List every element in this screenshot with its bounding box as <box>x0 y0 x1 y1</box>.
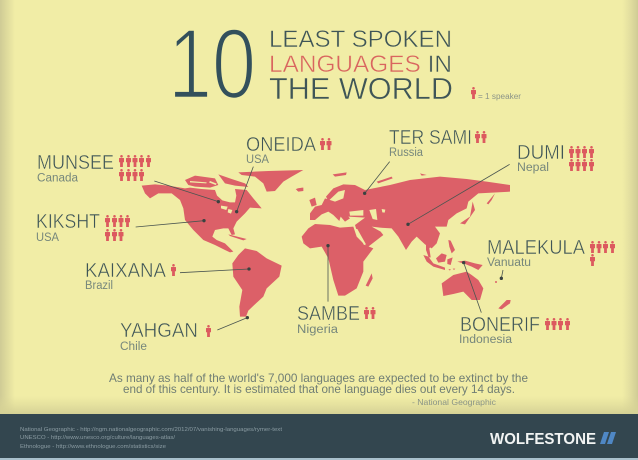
quote paragraph: As many as half of the world's 7,000 languages are expected to be extinct by the <box>109 371 528 385</box>
legend: 1 speaker: = 1 speaker <box>478 92 521 101</box>
footer bar <box>0 414 638 460</box>
quote paragraph <box>109 371 528 407</box>
label: Dumi <box>517 142 594 174</box>
label: Sambe: SAMBE <box>297 303 360 325</box>
inland seas <box>349 209 385 245</box>
label: Sambe <box>297 303 376 336</box>
label: Sambe: Nigeria <box>297 324 339 336</box>
label: Bonerif <box>459 314 570 346</box>
label: Kiksht: KIKSHT <box>36 211 100 233</box>
title line 1: LEAST SPOKEN <box>269 26 452 53</box>
label: Munsee: MUNSEE <box>37 152 114 174</box>
label: Ter Sami: TER SAMI <box>389 127 472 149</box>
label: Yahgan: YAHGAN <box>120 320 198 342</box>
label: Malekula: Vanuatu <box>487 257 531 269</box>
label: Dumi: DUMI <box>517 142 565 164</box>
Southeast Asia and Oceania <box>423 240 511 309</box>
title <box>168 8 453 119</box>
label: Bonerif: BONERIF <box>460 314 540 336</box>
label: Ter Sami <box>389 127 486 159</box>
label: Oneida: ONEIDA <box>246 134 317 156</box>
title line 2: LANGUAGES IN <box>269 51 452 78</box>
label: Munsee <box>37 152 151 184</box>
source links: Ethnologue - http://www.ethnologue.com/statistics/size <box>20 444 166 450</box>
label: Yahgan: Chile <box>120 341 147 353</box>
Africa, Eurasia and northern islands <box>297 172 510 296</box>
quote paragraph: - National Geographic <box>412 397 497 407</box>
label: Munsee: Canada <box>37 172 79 184</box>
source links: UNESCO - http://www.unesco.org/culture/languages-atlas/ <box>20 435 175 441</box>
label: Kaixana: KAIXANA <box>85 260 167 282</box>
South America <box>232 248 282 317</box>
label: Kaixana <box>85 260 176 292</box>
label: Yahgan <box>120 320 211 353</box>
label: Malekula <box>487 237 615 269</box>
label: Kaixana: Brazil <box>85 280 113 292</box>
logo: Wolfestone: WOLFESTONE <box>490 431 596 448</box>
world map <box>133 170 511 317</box>
label: Malekula: MALEKULA <box>487 237 586 259</box>
source links <box>20 427 283 450</box>
quote paragraph: end of this century. It is estimated that one language dies out every 14 days. <box>123 382 515 396</box>
label: Oneida: USA <box>246 154 269 166</box>
title line 3: THE WORLD <box>269 71 453 106</box>
label: Ter Sami: Russia <box>389 147 424 159</box>
label: Kiksht <box>36 211 130 244</box>
pointer lines <box>136 162 510 330</box>
label: Kiksht: USA <box>36 232 59 244</box>
label: Oneida <box>246 134 332 166</box>
label: Dumi: Nepal <box>517 162 549 174</box>
title number 10: 10 <box>168 8 256 119</box>
North America <box>133 170 303 252</box>
label: Bonerif: Indonesia <box>459 334 513 346</box>
Arctic channel and lake cut-outs <box>190 181 232 214</box>
source links: National Geographic - http://ngm.nationalgeographic.com/2012/07/vanishing-languages/rymer-text <box>20 427 283 433</box>
legend: 1 speaker <box>471 87 521 101</box>
